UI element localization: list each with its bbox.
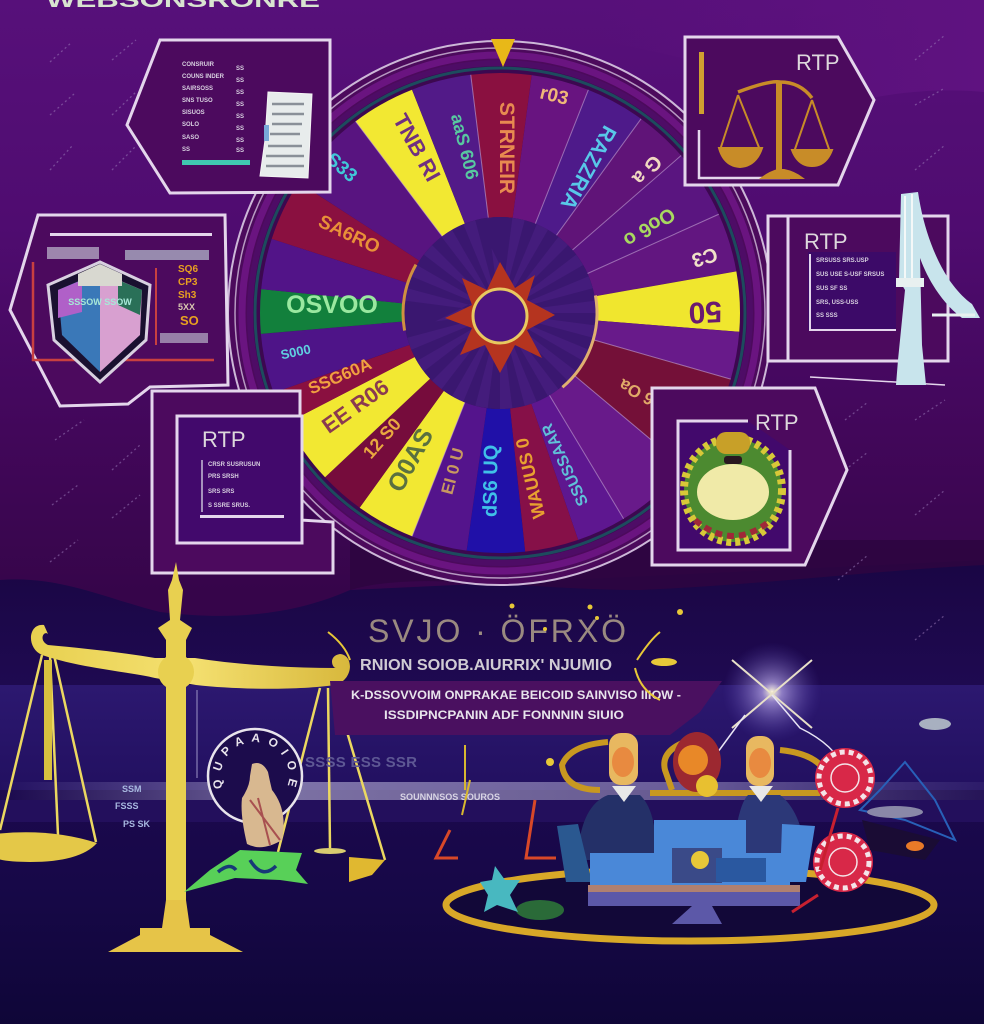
wheel segment labels: STRNEIR [495,102,518,194]
wheel segment labels: EI 0 U [438,446,468,496]
panel text lines: SS [236,66,244,72]
wheel segment labels: G a [627,150,666,190]
figure [242,763,284,847]
RTP body lines: S SSRE SRUS. [208,503,250,509]
banner line one: K-DSSOVVOIM ONPRAKAE BEICOID SAINVISO IIIOW - [351,688,681,702]
RTP inner card: SS SSS [816,313,838,319]
blue wire mountain [860,762,955,860]
panel: top-right scales [685,37,874,185]
wheel segment dividers [356,75,731,536]
stylized title: SVJO · ÖFRXÖ [368,613,626,649]
shield side labels: SO [180,313,199,328]
icon: ornate medal [684,432,782,542]
center star [445,262,555,373]
blurred band text [305,754,500,802]
panel text lines: SS [236,90,244,96]
wheel segment labels: 50 [688,294,723,329]
RTP inner card: SUS SF SS [816,286,847,292]
wheel segment labels: Oo6 o [619,203,679,251]
blurred band text: SOUNNNSOS SOUROS [400,792,500,802]
shield side labels: 5XX [178,302,195,312]
panel text lines: SS [236,78,244,84]
RTP heading: RTP [796,50,840,75]
wheel segment labels: OSVOO [286,291,378,319]
upper red chip [815,748,875,808]
wheel segment labels: 12 S0 [359,414,405,463]
RTP inner card: RTP [804,229,848,254]
wheel segment labels: EE R06 [317,374,393,438]
RTP inner card [804,229,896,330]
panel text lines: SS [236,102,244,108]
gold ring decorations [562,740,830,796]
scale chains left [0,655,96,842]
lower red chip [813,832,873,892]
green banknote [184,850,308,892]
center heading [351,613,681,722]
RTP inner card: SUS USE S-USF SRSUS [816,272,884,278]
icon: shield: SSSOW SSOW [68,297,132,307]
medallion arc text: QUPAAOIOE [212,734,298,788]
magenta banner [330,681,722,735]
panel text lines: COUNS INDER [182,74,225,80]
panel: bottom-left RTP [152,391,333,573]
right pan fragment [349,857,385,882]
RTP body lines: SRS SRS [208,489,234,495]
shield side labels [160,264,208,343]
panel text lines: SS [236,148,244,154]
RTP body lines: PRS SRSH [208,474,239,480]
panel text lines: SS [182,147,190,153]
glowing star [712,642,845,770]
gold bar [699,52,704,114]
small left labels [115,784,151,829]
shield side labels: SQ6 [178,264,198,275]
panel text lines: SS [236,126,244,132]
wheel segment labels: S33 [322,149,361,187]
wheel segment labels: O0AS [382,424,439,497]
banner line two: ISSDIPNCPANIN ADF FONNNIN SIUIO [384,708,624,722]
wheel pointer [491,39,515,67]
blurred band text: SSSS ESS SSR [305,754,417,771]
pole [158,562,192,950]
panel text lines: SS [236,114,244,120]
wheel segment labels: WAUUS 0 [512,436,549,521]
panel: top-left document [127,40,330,193]
gold platform [446,869,934,941]
medallion figure [196,690,304,848]
wheel segment labels: SA6RO [315,211,383,258]
panel text lines: SASO [182,135,199,141]
beam [31,625,350,689]
icon: shield [48,262,150,382]
teal bar [182,160,250,165]
panel text lines: SISUOS [182,110,205,116]
small left labels: SSM [122,784,142,794]
wheel segment labels: C3 [689,242,720,271]
panel: right RTP with statue [768,192,980,385]
wheel segment labels: SSUSSAAR [539,420,592,508]
blue desk and monitor [557,820,815,924]
RTP inner card: SRS, USS-USS [816,300,858,306]
panel: shield [10,215,228,406]
icon: small scales [719,82,832,178]
panel text lines: SAIRSOSS [182,86,213,92]
RTP heading: RTP [202,427,246,452]
panel: medal RTP [652,388,847,565]
small left labels: PS SK [123,819,151,829]
prize wheel [228,39,772,585]
wheel segment labels: RAZZRIA [556,122,620,213]
big gold scales [0,562,385,952]
wheel segments [263,76,737,550]
wheel segment labels: r03 [538,82,570,110]
RTP body lines: CRSR SUSRUSUN [208,462,260,468]
wheel segment labels: S000 [279,341,312,362]
panel text lines: SOLO [182,122,199,128]
wheel hub [388,201,612,425]
RTP heading: RTP [755,410,799,435]
wheel segment labels: o6 6 Oa [615,375,679,420]
left presenter [578,733,656,860]
teal crystal burst [480,866,520,912]
panel text lines: SS [236,138,244,144]
wheel segment labels: TNB RI [388,109,446,186]
wheel segment labels: aaS 606 [447,112,483,182]
shield side labels: Sh3 [178,290,197,301]
gold sparkles [328,604,683,858]
RTP body lines [200,460,284,518]
icon: paper sheet [260,92,312,178]
red chip stem [792,808,838,912]
center figure [673,732,721,797]
wheel segment labels [279,82,723,521]
icon: white statue column [896,192,980,385]
shield side labels: CP3 [178,277,198,288]
panel text lines: SNS TUSO [182,98,213,104]
green glow item [516,900,564,920]
panel text lines [182,62,244,154]
scale chains right [278,688,385,860]
left pan [0,832,97,862]
wheel segment labels: SSG60A [305,354,375,398]
small saucer [919,718,951,730]
panel text lines: CONSRUIR [182,62,215,68]
wheel segment labels: dS6 UQ [479,445,503,517]
subtitle: RNION SOIOB.AIURRIX' NJUMIO [360,657,612,674]
small left labels: FSSS [115,801,139,811]
presenters desk scene [446,718,955,941]
decorative dashes [50,35,945,640]
right presenter [733,736,806,860]
RTP inner card: SRSUSS SRS.USP [816,258,869,264]
base [108,900,243,952]
